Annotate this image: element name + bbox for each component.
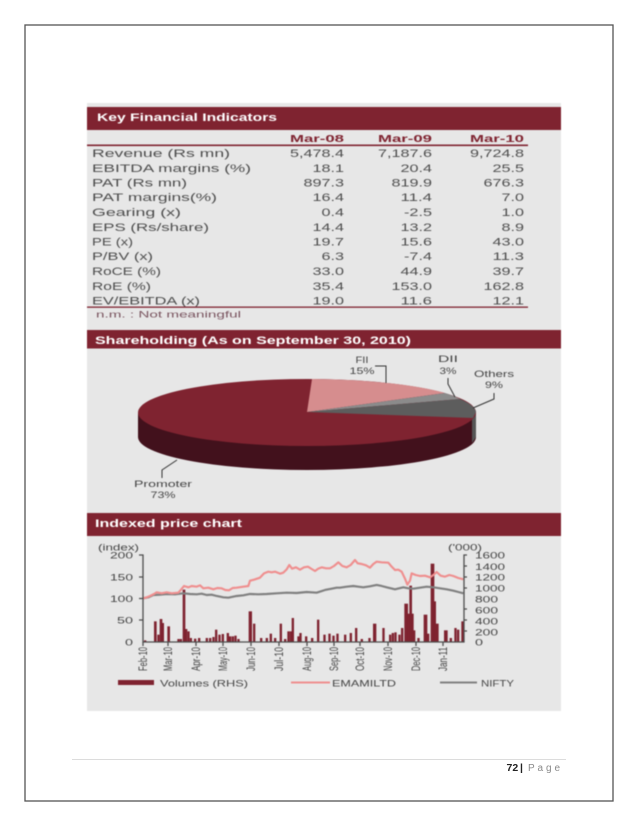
table values Mar-08: 14.4: [312, 222, 344, 234]
month labels: May-10: [218, 647, 230, 671]
table values Mar-08: 897.3: [304, 178, 344, 190]
table values Mar-08: 19.7: [312, 236, 344, 248]
table values Mar-10: 7.0: [502, 192, 524, 204]
page number: Page: [528, 763, 560, 774]
table values Mar-09: 11.4: [400, 192, 432, 204]
table values Mar-08: 6.3: [322, 251, 344, 263]
line: EMAMILTD: [143, 560, 463, 598]
right axis labels: 600: [475, 606, 498, 616]
table values Mar-09: 11.6: [400, 296, 432, 308]
table row labels: Revenue (Rs mn): [92, 148, 230, 160]
label: FII: [350, 355, 386, 383]
table values Mar-09: 44.9: [400, 266, 432, 278]
table column headers: Mar-10: [470, 133, 524, 145]
legend: Volumes (RHS): [160, 678, 248, 690]
table values Mar-09: [378, 148, 432, 308]
heading: indexed price chart: Indexed price chart: [95, 518, 243, 530]
table column headers: Mar-09: [378, 133, 432, 145]
slice: FII 15%: [307, 379, 445, 412]
table values Mar-10: 43.0: [492, 236, 524, 248]
page number: [506, 762, 560, 774]
table values Mar-08: 35.4: [312, 281, 344, 293]
table row labels: PAT margins(%): [92, 192, 217, 204]
month labels: Mar-10: [163, 647, 175, 671]
slice: others 9%: [307, 399, 476, 418]
slice: promoter 73%: [138, 379, 476, 446]
legend: [118, 678, 515, 690]
label: promoter: Promoter: [134, 479, 192, 489]
label: FII: 15%: [350, 366, 374, 376]
left axis labels: 150: [110, 572, 133, 584]
label: DII: DII: [438, 354, 458, 364]
label: promoter: [134, 460, 192, 500]
table row labels: RoE (%): [92, 281, 151, 293]
table row labels: EBITDA margins (%): [92, 163, 251, 175]
table values Mar-08: 18.1: [312, 163, 344, 175]
table values Mar-10: 8.9: [502, 222, 524, 234]
table values Mar-09: -7.4: [404, 251, 432, 263]
left axis labels: 0: [125, 638, 133, 648]
table values Mar-10: 9,724.8: [470, 148, 524, 160]
table footnote: n.m. : Not meaningful: [96, 310, 241, 320]
table values Mar-09: 13.2: [400, 222, 432, 234]
label: others: [473, 369, 515, 408]
right axis labels: 0: [475, 638, 483, 648]
right axis labels: 1400: [475, 562, 505, 573]
table values Mar-10: 1.0: [502, 207, 524, 219]
month labels: Aug-10: [302, 647, 314, 671]
right axis labels: 1000: [475, 584, 505, 594]
table row labels: Gearing (x): [92, 207, 181, 219]
month labels: Jan-11: [438, 647, 450, 671]
slice: DII 3%: [307, 393, 460, 412]
left axis labels: 200: [110, 550, 133, 562]
right axis labels: 1600: [475, 550, 505, 562]
right axis labels: [475, 550, 505, 648]
page number: |: [520, 762, 523, 774]
table values Mar-09: -2.5: [404, 207, 432, 219]
table values Mar-08: 0.4: [322, 207, 344, 219]
right axis labels: 1200: [475, 572, 505, 584]
left axis labels: [110, 550, 133, 648]
volume bars: [144, 564, 464, 642]
axis titles: [98, 542, 482, 552]
label: others: 9%: [485, 380, 503, 390]
month labels: Oct-10: [355, 647, 367, 671]
right axis labels: 800: [475, 594, 498, 606]
month labels: Jul-10: [274, 647, 286, 671]
month labels: Sep-10: [329, 647, 341, 671]
table values Mar-09: 153.0: [392, 281, 432, 293]
month labels: Feb-10: [138, 647, 150, 671]
table values Mar-08: 16.4: [312, 192, 344, 204]
month labels: [138, 647, 450, 671]
label: FII: FII: [356, 355, 368, 365]
table values Mar-08: 19.0: [312, 296, 344, 308]
table values Mar-10: 12.1: [492, 296, 524, 308]
combo chart: indexed price and volumes: [98, 542, 515, 690]
right axis labels: 200: [475, 628, 498, 638]
month labels: Dec-10: [411, 647, 423, 671]
label: DII: 3%: [440, 366, 456, 376]
month labels: Apr-10: [191, 647, 203, 671]
table values Mar-10: 162.8: [484, 281, 524, 293]
table column headers: [290, 133, 524, 145]
table row labels: EPS (Rs/share): [92, 222, 209, 234]
heading: indexed price chart: [87, 513, 561, 536]
table: financial indicators: [87, 133, 528, 308]
table values Mar-09: 819.9: [392, 178, 432, 190]
label: promoter: 73%: [150, 490, 176, 500]
table row labels: [92, 148, 251, 308]
pie side wall: [138, 412, 476, 470]
heading: key financial indicators: [87, 107, 561, 130]
label: DII: [438, 354, 458, 397]
table values Mar-08: 33.0: [312, 266, 344, 278]
month labels: Jun-10: [246, 647, 258, 671]
table row labels: RoCE (%): [92, 266, 161, 278]
table values Mar-10: 25.5: [492, 163, 524, 175]
month labels: Nov-10: [383, 647, 395, 671]
pie chart: shareholding: [134, 354, 515, 500]
table row labels: PE (x): [92, 236, 133, 248]
right axis labels: 400: [475, 616, 498, 628]
table values Mar-09: 7,187.6: [378, 148, 432, 160]
table values Mar-10: [470, 148, 524, 308]
page number: 72: [506, 762, 518, 774]
table row labels: PAT (Rs mn): [92, 178, 187, 190]
axis titles: ('000): [448, 542, 482, 552]
axes: [139, 555, 467, 646]
table values Mar-08: [290, 148, 344, 308]
left axis labels: 100: [110, 594, 133, 605]
table column headers: Mar-08: [290, 133, 344, 145]
left axis labels: 50: [117, 616, 133, 626]
heading: shareholding: Shareholding (As on September 30, 2010): [95, 335, 412, 347]
table values Mar-09: 15.6: [400, 236, 432, 248]
table values Mar-10: 39.7: [492, 266, 524, 278]
axis titles: (index): [98, 542, 139, 552]
heading: key financial indicators: Key Financial Indicators: [97, 112, 277, 124]
table values Mar-10: 11.3: [492, 251, 524, 263]
line: NIFTY: [143, 585, 463, 598]
report panel: [87, 103, 561, 711]
table row labels: EV/EBITDA (x): [92, 296, 200, 308]
legend: EMAMILTD: [332, 678, 396, 690]
heading: shareholding: [87, 330, 561, 348]
legend: NIFTY: [481, 678, 515, 690]
table values Mar-08: 5,478.4: [290, 148, 344, 160]
table row labels: P/BV (x): [92, 251, 153, 263]
table values Mar-09: 20.4: [400, 163, 432, 175]
label: others: Others: [474, 369, 515, 379]
table values Mar-10: 676.3: [484, 178, 524, 190]
